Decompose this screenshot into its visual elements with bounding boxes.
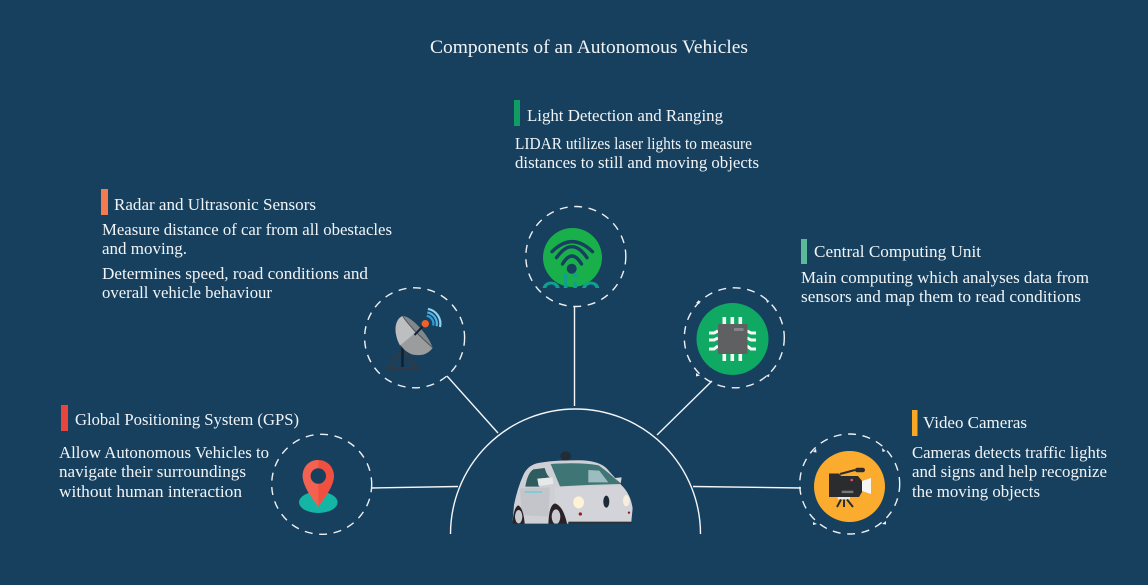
- panel: central computing unit: [801, 239, 1089, 306]
- connector: video cameras to dome: [693, 486, 801, 488]
- GPS description: Allow Autonomous Vehicles to: [59, 443, 269, 462]
- computing description: sensors and map them to read conditions: [801, 287, 1081, 306]
- video description: the moving objects: [912, 482, 1040, 501]
- GPS description: navigate their surroundings: [59, 462, 246, 481]
- LIDAR heading: Light Detection and Ranging: [527, 106, 723, 125]
- GPS heading: Global Positioning System (GPS): [75, 410, 299, 429]
- connector: GPS to dome: [371, 486, 458, 488]
- panel: LIDAR: [514, 100, 759, 172]
- LIDAR description: distances to still and moving objects: [515, 153, 759, 172]
- connector: computing unit to dome: [657, 381, 712, 435]
- icon: location pin: [272, 434, 372, 534]
- LIDAR description: [515, 134, 759, 172]
- computing accent bar: [801, 239, 807, 264]
- computing heading: Central Computing Unit: [814, 242, 981, 261]
- panel: GPS: [59, 405, 299, 501]
- icon: video camera: [800, 434, 900, 534]
- GPS description: without human interaction: [59, 482, 242, 501]
- radar description: Measure distance of car from all obestacles: [102, 220, 392, 239]
- computing description: Main computing which analyses data from: [801, 268, 1089, 287]
- radar heading: Radar and Ultrasonic Sensors: [114, 195, 316, 214]
- panel: video cameras: [912, 410, 1107, 501]
- icon: computer chip: [684, 288, 784, 388]
- LIDAR accent bar: [514, 100, 520, 126]
- GPS description: [59, 443, 269, 501]
- connector: LIDAR to dome: [574, 307, 576, 406]
- LIDAR description: LIDAR utilizes laser lights to measure: [515, 134, 752, 153]
- video accent bar: [912, 410, 918, 436]
- video description: Cameras detects traffic lights: [912, 443, 1107, 462]
- video heading: Video Cameras: [923, 413, 1027, 432]
- radar description: [102, 220, 392, 302]
- icon: LIDAR wifi signal: clic: [540, 266, 601, 313]
- radar description: overall vehicle behaviour: [102, 283, 272, 302]
- icon: radar dish: [365, 288, 465, 388]
- computing description: [801, 268, 1089, 306]
- connector: radar to dome: [447, 376, 498, 433]
- radar accent bar: [101, 189, 108, 215]
- video description: and signs and help recognize: [912, 462, 1107, 481]
- radar description: and moving.: [102, 239, 187, 258]
- GPS accent bar: [61, 405, 68, 431]
- panel: radar and ultrasonic sensors: [101, 189, 392, 302]
- radar description: Determines speed, road conditions and: [102, 264, 369, 283]
- central dome arc: [450, 409, 700, 534]
- car illustration: [512, 451, 633, 528]
- icon: LIDAR wifi signal: [526, 206, 626, 313]
- title: Components of an Autonomous Vehicles: [430, 38, 748, 58]
- video description: [912, 443, 1107, 501]
